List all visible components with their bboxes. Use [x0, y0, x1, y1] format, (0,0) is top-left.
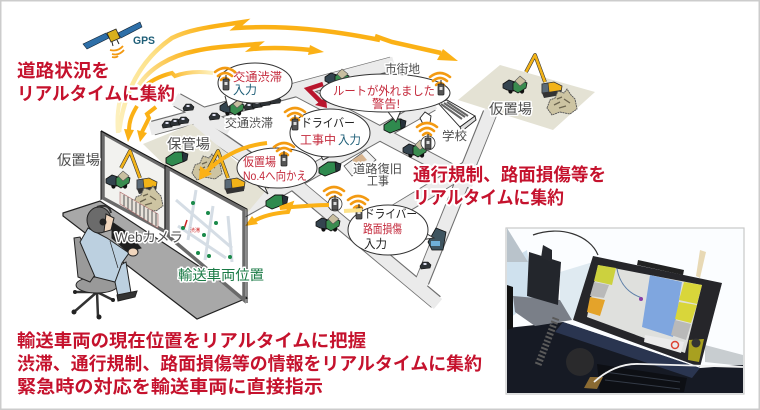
icon: truck: [503, 76, 527, 94]
map labels: 学校: [442, 128, 467, 143]
label: temporary yard: 仮置場: [489, 101, 532, 117]
icon: shirt: [80, 228, 129, 282]
callout: traffic jam input: [218, 63, 292, 107]
callout: driver road damage input: [348, 205, 434, 255]
callout: route deviation warning: [320, 74, 450, 122]
map labels: [167, 62, 467, 188]
text block: summary: 緊急時の対応を輸送車両に直接指示: [17, 376, 323, 397]
panel: right temporary yard: [458, 55, 595, 130]
icon: truck on left monitor: [106, 171, 130, 189]
label: left monitor yard: 仮置場: [57, 152, 100, 168]
icon: fence on left monitor: [120, 192, 158, 228]
school building: [420, 100, 476, 131]
arrow: road damage signal to map monitor: [245, 204, 362, 226]
callout: route deviation warning: ルートが外れました: [333, 83, 435, 98]
callout: driver road damage input: 路面損傷: [363, 221, 402, 236]
map labels: 市街地: [385, 62, 420, 76]
map labels: 保管場: [167, 136, 210, 152]
icon: excavator on left monitor: [121, 151, 157, 194]
icon: tablet: [573, 256, 722, 367]
icon: white cable: [594, 364, 743, 382]
icon: chair base: [74, 292, 113, 317]
heading: traffic regulations: [413, 164, 606, 208]
panel: operator desk: [63, 201, 247, 319]
callout: go to yard No.4: No.4へ向かえ: [243, 168, 307, 183]
callout: driver construction input: 入力: [338, 133, 361, 147]
icon: vehicles on roads: [162, 69, 446, 269]
map labels: 道路復旧: [353, 161, 402, 176]
callout: traffic jam input: 入力: [233, 83, 257, 97]
panel: operator: [72, 206, 141, 320]
panel: map monitor: [165, 165, 247, 303]
label: web camera: Webカメラ: [115, 229, 183, 245]
chart: vehicle location map: 渋滞: [190, 227, 200, 234]
callout: driver road damage input: 入力: [364, 237, 387, 251]
callout: go to yard No.4: 仮置場: [243, 155, 276, 169]
panel: left monitor: [101, 131, 168, 234]
heading: traffic regulations: 通行規制、路面損傷等を: [413, 164, 606, 185]
icon: trousers: [100, 262, 131, 296]
heading: road conditions: リアルタイムに集約: [17, 84, 175, 104]
callout: driver construction input: 工事中: [300, 132, 336, 147]
callout: driver road damage input: ドライバー: [364, 207, 417, 221]
icon: soil mound: [547, 89, 577, 115]
callout: route deviation warning: 警告!: [372, 96, 400, 111]
icon: chair back: [74, 237, 97, 282]
panel: storage yard ground: [143, 124, 268, 212]
icon: red route deviation arrow: [308, 84, 327, 108]
label: GPS: GPS: [133, 35, 155, 47]
icon: head with headset: [87, 207, 111, 233]
text block: summary: 輸送車両の現在位置をリアルタイムに把握: [17, 331, 366, 351]
text block: summary: 渋滞、通行規制、路面損傷等の情報をリアルタイムに集約: [17, 353, 482, 374]
arrow: traffic jam signal: [143, 72, 213, 88]
arrow: signal to yard monitor: [199, 143, 267, 180]
heading: road conditions: 道路状況を: [17, 61, 110, 81]
arrow: signals down to monitor: [117, 100, 156, 142]
arrow: outer signal arc to right yard: [119, 22, 458, 132]
callout: go to yard No.4: [237, 148, 317, 194]
heading: traffic regulations: リアルタイムに集約: [413, 188, 564, 208]
map labels: 交通渋滞: [225, 115, 273, 130]
text block: summary: [17, 331, 482, 397]
icon: keyboard and camera: [112, 222, 141, 252]
arrow: middle signal arc: [139, 44, 324, 85]
map labels: 工事: [367, 174, 389, 188]
icon: radio handset: [513, 231, 598, 365]
heading: road conditions: [17, 61, 175, 104]
callout: driver construction input: [290, 109, 370, 160]
label: vehicle position: 輸送車両位置: [178, 267, 264, 283]
callout: traffic jam input: 交通渋滞: [233, 69, 282, 84]
photo: in-vehicle tablet and radio: [506, 228, 744, 394]
callout: driver construction input: ドライバー: [301, 116, 355, 130]
icon: excavator: [526, 55, 562, 98]
icon: radio signals: [215, 68, 450, 219]
panel: road map: [150, 63, 491, 304]
icon: storage yard excavator and soil: [192, 151, 245, 194]
icon: GPS satellite: [83, 22, 142, 57]
icon: soil on left monitor: [133, 186, 163, 212]
